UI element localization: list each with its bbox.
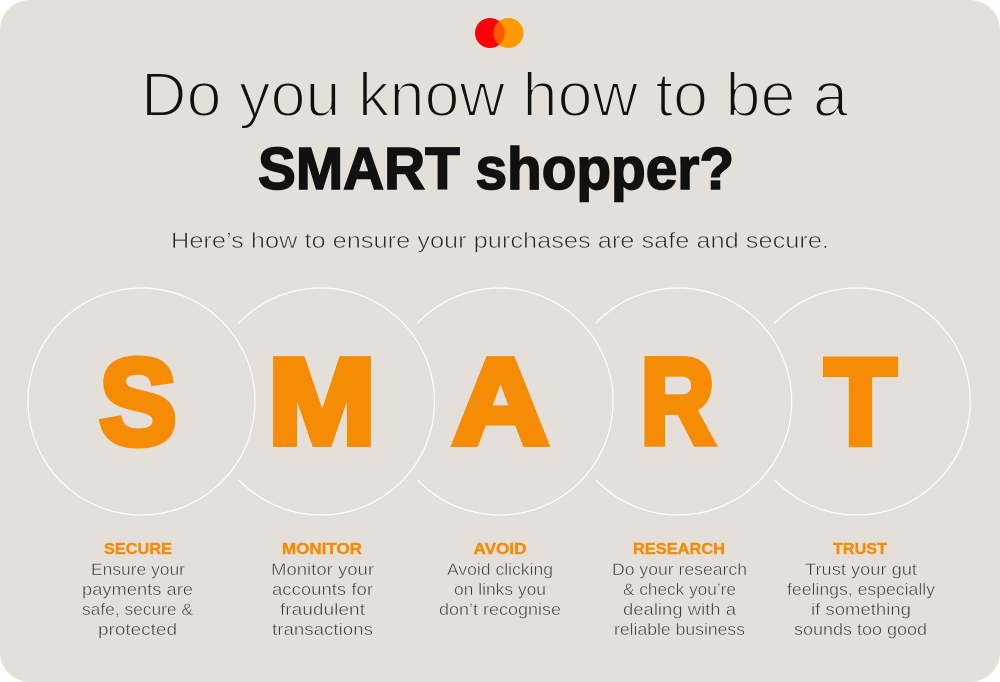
circle: T — [774, 288, 970, 515]
text block: secure: payments are — [82, 581, 193, 599]
text block: trust: Trust your gut — [805, 561, 917, 579]
text block: trust: feelings, especially — [787, 581, 936, 599]
text block: trust: TRUST — [833, 541, 887, 558]
circle: T: T — [825, 334, 896, 470]
subtitle: Here’s how to ensure your purchases are safe and secure. — [171, 228, 829, 253]
circle: M — [239, 288, 434, 515]
circle: S — [28, 288, 255, 515]
text block: avoid: Avoid clicking — [447, 561, 553, 579]
text block: research: & check you’re — [623, 581, 736, 599]
text block: secure: protected — [98, 621, 177, 639]
title: Do you know how to be a — [141, 61, 849, 130]
circle: S: S — [100, 334, 176, 470]
text block: avoid: AVOID — [474, 541, 526, 558]
text block: secure — [82, 541, 193, 639]
text block: avoid: don’t recognise — [439, 601, 561, 619]
text block: monitor: transactions — [272, 621, 373, 639]
icon: overlapping circles logo — [475, 18, 524, 48]
text block: secure: safe, secure & — [82, 601, 193, 619]
text block: avoid — [439, 541, 561, 619]
text block: monitor: fraudulent — [280, 601, 365, 619]
circle: A: A — [452, 334, 548, 470]
text block: research — [612, 541, 747, 639]
text block: research: dealing with a — [623, 601, 737, 619]
text block: monitor: MONITOR — [282, 541, 362, 558]
text block: monitor: Monitor your — [271, 561, 375, 579]
text block: trust: if something — [811, 601, 911, 619]
title — [141, 61, 849, 202]
text block: monitor — [271, 541, 375, 639]
circle: R: R — [640, 334, 714, 470]
title: SMART shopper? — [258, 136, 734, 202]
circle: A — [417, 288, 613, 515]
text block: trust — [787, 541, 936, 639]
text block: monitor: accounts for — [272, 581, 374, 599]
text block: secure: Ensure your — [91, 561, 186, 579]
text block: research: Do your research — [612, 561, 747, 579]
circle: R — [596, 288, 792, 515]
text block: avoid: on links you — [454, 581, 546, 599]
text block: research: reliable business — [614, 621, 745, 639]
text block: research: RESEARCH — [633, 541, 725, 558]
text block: trust: sounds too good — [794, 621, 927, 639]
text block: secure: SECURE — [104, 541, 172, 558]
circle: M: M — [268, 334, 376, 470]
